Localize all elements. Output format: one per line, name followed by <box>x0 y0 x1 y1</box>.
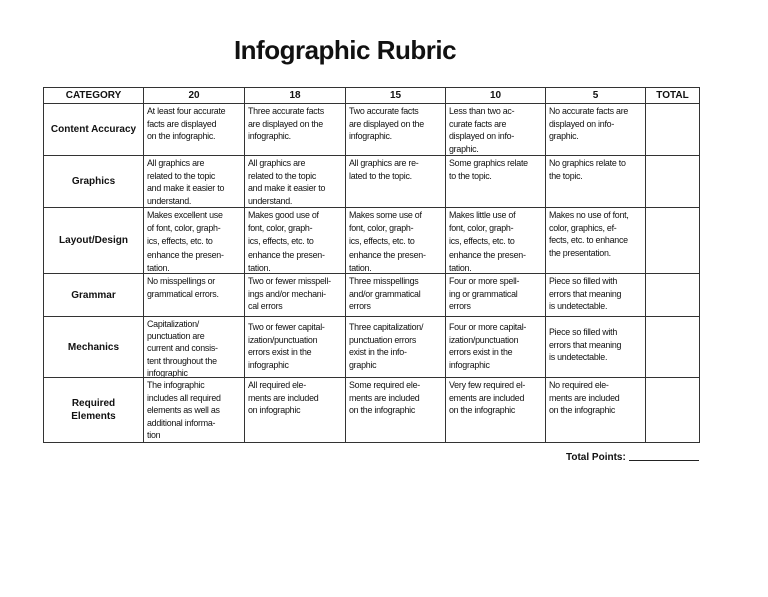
title: Infographic Rubric <box>234 35 456 65</box>
rubric table: Makes good use of <box>248 210 319 220</box>
rubric table: ics, effects, etc. to <box>449 236 515 246</box>
total points line: Total Points: <box>566 452 626 463</box>
rubric table: punctuation are <box>147 331 204 341</box>
rubric table: Makes excellent use <box>147 210 223 220</box>
rubric table: infographic <box>449 360 490 370</box>
rubric table: No required ele- <box>549 380 609 390</box>
rubric table: cal errors <box>248 301 282 311</box>
rubric table: Four or more capital- <box>449 322 526 332</box>
rubric table: to the topic. <box>449 171 492 181</box>
rubric table: on the infographic <box>449 405 515 415</box>
rubric table: and make it easier to <box>248 183 325 193</box>
rubric table: At least four accurate <box>147 106 225 116</box>
rubric table: Content Accuracy <box>51 124 136 135</box>
rubric table: tation. <box>349 263 371 273</box>
rubric table: and/or grammatical <box>349 289 420 299</box>
rubric table: Four or more spell- <box>449 276 519 286</box>
rubric table: No graphics relate to <box>549 158 626 168</box>
rubric table: ization/punctuation <box>449 335 518 345</box>
rubric table: Three misspellings <box>349 276 418 286</box>
rubric table: enhance the presen- <box>449 250 526 260</box>
rubric table: color, graphics, ef- <box>549 223 617 233</box>
rubric table: The infographic <box>147 380 204 390</box>
rubric table: displayed on info- <box>449 131 514 141</box>
rubric table: additional informa- <box>147 418 215 428</box>
rubric table: the topic. <box>549 171 583 181</box>
rubric table: Grammar <box>71 290 116 300</box>
rubric table: infographic <box>147 368 188 378</box>
rubric table: facts are displayed <box>147 119 216 129</box>
rubric table: tation. <box>449 263 471 273</box>
rubric table: graphic. <box>449 144 479 154</box>
rubric table: ics, effects, etc. to <box>248 236 314 246</box>
rubric table: infographic <box>248 360 289 370</box>
rubric table: All graphics are <box>147 158 204 168</box>
rubric table: ics, effects, etc. to <box>147 236 213 246</box>
rubric table: TOTAL <box>656 90 689 101</box>
rubric table: curate facts are <box>449 119 506 129</box>
rubric table: font, color, graph- <box>349 223 413 233</box>
rubric table: 10 <box>490 90 501 101</box>
rubric table: the presentation. <box>549 248 611 258</box>
rubric table: Three capitalization/ <box>349 322 423 332</box>
rubric table: ics, effects, etc. to <box>349 236 415 246</box>
rubric table: enhance the presen- <box>248 250 325 260</box>
rubric table: lated to the topic. <box>349 171 412 181</box>
rubric table: Two or fewer capital- <box>248 322 325 332</box>
rubric table: errors <box>349 301 371 311</box>
rubric table: on the infographic <box>349 405 415 415</box>
rubric table: on the infographic. <box>147 131 215 141</box>
rubric table: Graphics <box>72 176 115 187</box>
rubric table: Layout/Design <box>59 235 128 246</box>
rubric table: Elements <box>71 411 116 422</box>
rubric table: fects, etc. to enhance <box>549 235 628 245</box>
rubric table: Makes no use of font, <box>549 210 629 220</box>
rubric table: elements as well as <box>147 405 220 415</box>
rubric table: exist in the info- <box>349 347 407 357</box>
rubric table: includes all required <box>147 393 221 403</box>
rubric table: Less than two ac- <box>449 106 514 116</box>
rubric table: enhance the presen- <box>349 250 426 260</box>
rubric table: Two accurate facts <box>349 106 418 116</box>
rubric table <box>43 87 700 443</box>
rubric table: errors exist in the <box>449 347 512 357</box>
rubric table: on the infographic <box>549 405 615 415</box>
rubric table: ements are included <box>449 393 524 403</box>
rubric table: All graphics are re- <box>349 158 418 168</box>
rubric table: Some required ele- <box>349 380 420 390</box>
rubric table: font, color, graph- <box>248 223 312 233</box>
rubric table: infographic. <box>349 131 392 141</box>
rubric table: CATEGORY <box>66 90 121 101</box>
rubric table: are displayed on the <box>248 119 323 129</box>
rubric table: understand. <box>248 196 292 206</box>
rubric table: Two or fewer misspell- <box>248 276 331 286</box>
rubric table: and make it easier to <box>147 183 224 193</box>
rubric table: ization/punctuation <box>248 335 317 345</box>
rubric table: Three accurate facts <box>248 106 324 116</box>
rubric table: grammatical errors. <box>147 289 219 299</box>
rubric table: current and consis- <box>147 343 218 353</box>
rubric table: Makes little use of <box>449 210 515 220</box>
rubric table: tion <box>147 430 160 440</box>
rubric table: font, color, graph- <box>449 223 513 233</box>
rubric table: infographic. <box>248 131 291 141</box>
rubric table: All required ele- <box>248 380 306 390</box>
rubric table: Capitalization/ <box>147 319 199 329</box>
rubric table: tent throughout the <box>147 356 217 366</box>
rubric table: errors that meaning <box>549 289 621 299</box>
rubric table: Makes some use of <box>349 210 422 220</box>
rubric table: enhance the presen- <box>147 250 224 260</box>
rubric table: are displayed on the <box>349 119 424 129</box>
rubric table: Piece so filled with <box>549 327 617 337</box>
rubric table: ments are included <box>248 393 318 403</box>
rubric table: tation. <box>147 263 169 273</box>
rubric table: errors <box>449 301 471 311</box>
rubric table: ing or grammatical <box>449 289 518 299</box>
rubric table: ments are included <box>549 393 620 403</box>
rubric table: errors that meaning <box>549 340 621 350</box>
rubric table: graphic. <box>549 131 579 141</box>
rubric table: ings and/or mechani- <box>248 289 326 299</box>
rubric table: of font, color, graph- <box>147 223 220 233</box>
rubric table: 5 <box>593 90 598 101</box>
rubric table: 20 <box>188 90 200 101</box>
rubric table: No misspellings or <box>147 276 215 286</box>
rubric table: errors exist in the <box>248 347 311 357</box>
rubric table: punctuation errors <box>349 335 416 345</box>
rubric table: related to the topic <box>147 171 215 181</box>
rubric table: No accurate facts are <box>549 106 628 116</box>
rubric table: tation. <box>248 263 270 273</box>
rubric table: related to the topic <box>248 171 316 181</box>
rubric table: understand. <box>147 196 191 206</box>
rubric table: Very few required el- <box>449 380 525 390</box>
rubric table: Mechanics <box>68 342 119 352</box>
rubric table: 18 <box>289 90 301 101</box>
rubric table: Piece so filled with <box>549 276 617 286</box>
rubric table: Some graphics relate <box>449 158 528 168</box>
rubric table: ments are included <box>349 393 420 403</box>
rubric table: graphic <box>349 360 376 370</box>
rubric table: displayed on info- <box>549 119 614 129</box>
rubric table: Required <box>72 398 115 409</box>
rubric table: is undetectable. <box>549 301 607 311</box>
rubric table: 15 <box>390 90 401 101</box>
rubric table: on infographic <box>248 405 300 415</box>
rubric table: All graphics are <box>248 158 305 168</box>
rubric table: is undetectable. <box>549 352 607 362</box>
